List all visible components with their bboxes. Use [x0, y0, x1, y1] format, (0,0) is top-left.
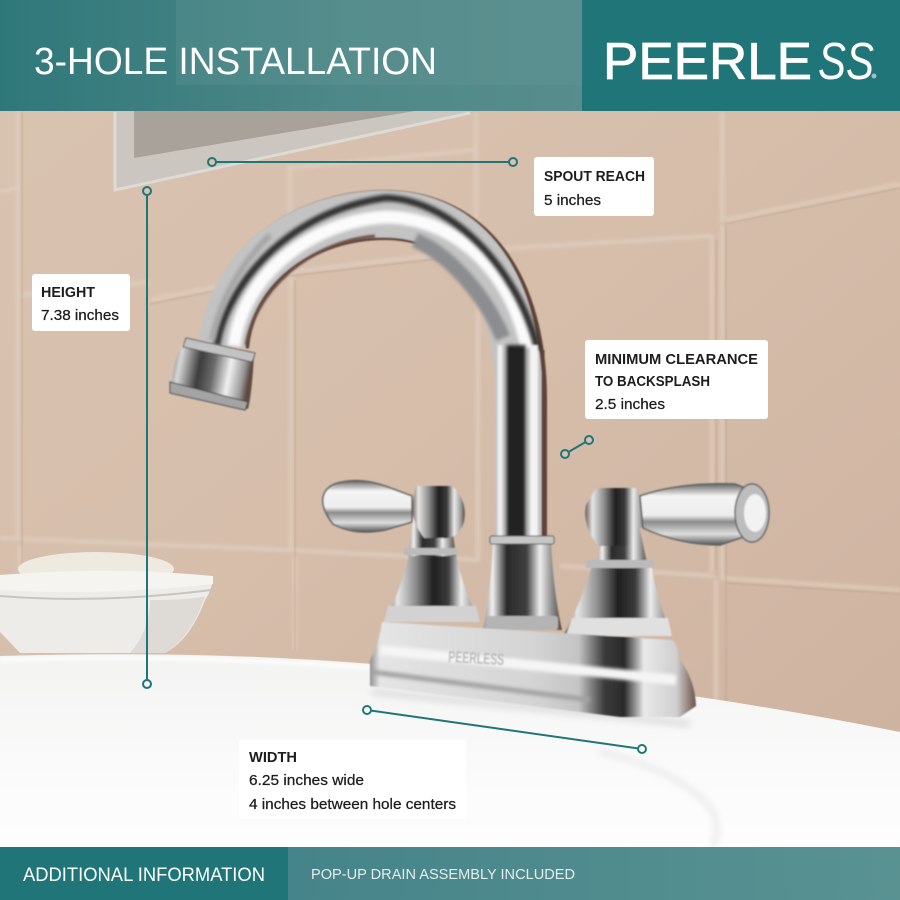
right handle [564, 484, 769, 636]
callout: spout reach: 5 inches [544, 193, 601, 209]
callout: height: HEIGHT [41, 285, 95, 301]
callout: minimum clearance: TO BACKSPLASH [595, 374, 710, 390]
centre stem collar [483, 536, 562, 630]
vertical stem shading [506, 345, 526, 540]
callout: spout reach: SPOUT REACH [544, 169, 645, 185]
soap dish [0, 552, 213, 653]
logo: Peerless: PEERLE [603, 33, 812, 91]
callout: width [239, 739, 466, 819]
callout: width: 4 inches between hole centers [249, 797, 456, 813]
callout: width: WIDTH [249, 750, 297, 766]
callout: minimum clearance: MINIMUM CLEARANCE [595, 352, 758, 368]
callout: width: 6.25 inches wide [249, 773, 364, 789]
title: 3-HOLE INSTALLATION [34, 41, 437, 83]
callout: height [32, 274, 130, 331]
dimension: spout reach line [208, 158, 517, 166]
sink basin [0, 654, 900, 900]
dimension: width line [363, 706, 646, 753]
base engraved logo: PEERLESS [448, 649, 505, 669]
faucet [170, 198, 769, 717]
logo panel: SS [818, 33, 874, 91]
footer heading: ADDITIONAL INFORMATION [23, 865, 265, 886]
header band [0, 0, 582, 111]
base plate [370, 622, 696, 717]
dimension: height line [143, 187, 151, 688]
footer text: POP-UP DRAIN ASSEMBLY INCLUDED [311, 867, 575, 883]
mirror frame [115, 111, 480, 190]
aerator nozzle [170, 338, 255, 410]
left handle [323, 481, 480, 622]
logo panel [582, 0, 900, 111]
gooseneck spout [212, 198, 543, 545]
footer band [0, 847, 900, 900]
callout: height: 7.38 inches [41, 308, 119, 324]
callout: spout reach [534, 157, 654, 216]
callout: minimum clearance: 2.5 inches [595, 397, 665, 413]
dimension: clearance line [561, 436, 593, 458]
callout: minimum clearance [585, 340, 768, 419]
